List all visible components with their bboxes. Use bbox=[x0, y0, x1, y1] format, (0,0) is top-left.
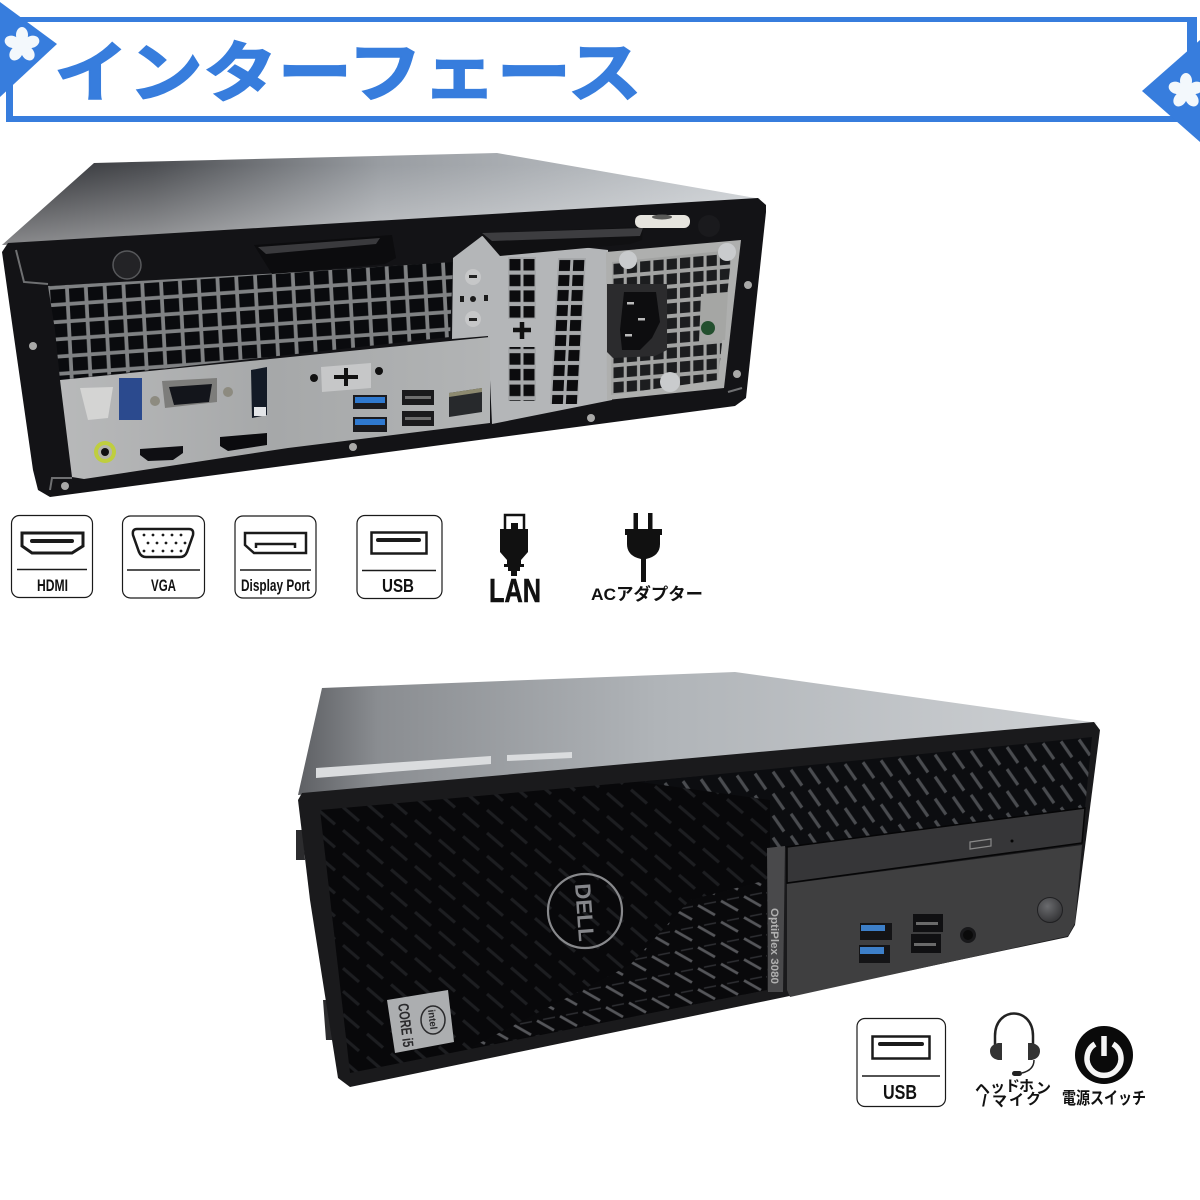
VGA port bbox=[150, 378, 233, 408]
icon: AC adapter plug bbox=[591, 513, 703, 604]
lower bright slashes bbox=[470, 880, 767, 1048]
expansion slot 1 bbox=[508, 257, 536, 401]
label: headphone / mic: / bbox=[982, 1091, 987, 1110]
icon: headset bbox=[990, 1014, 1040, 1076]
centre bracket bbox=[452, 236, 612, 424]
title banner bbox=[0, 2, 1200, 142]
LAN port bbox=[449, 388, 482, 417]
model text: OptiPlex 3080 bbox=[768, 908, 780, 984]
icon: power switch bbox=[1075, 1026, 1133, 1084]
rear chassis outline bbox=[2, 198, 766, 497]
barcode label bbox=[251, 367, 267, 418]
screw bbox=[698, 215, 720, 237]
front USB 3 ports bbox=[859, 923, 892, 963]
I/O plate bbox=[60, 337, 490, 479]
front audio jack bbox=[962, 928, 974, 942]
drive indicator bbox=[1010, 840, 1014, 842]
icon: HDMI bbox=[12, 516, 92, 598]
PSU plate bbox=[606, 240, 741, 400]
icon: Display Port bbox=[235, 516, 316, 598]
icon: LAN plug: LAN bbox=[489, 572, 541, 609]
silver strips bbox=[316, 752, 572, 778]
icon: AC adapter plug: ACアダプター bbox=[591, 584, 703, 604]
icon row: rear ports bbox=[12, 513, 703, 609]
photo: front of desktop PC bbox=[296, 672, 1100, 1087]
chassis screws bbox=[29, 281, 752, 490]
front top cover bbox=[298, 672, 1098, 795]
rear USB 3 ports bbox=[353, 395, 387, 432]
Dell logo bbox=[548, 874, 622, 948]
LED panel bbox=[699, 292, 728, 342]
Windows blue label bbox=[119, 378, 142, 420]
rear top cover bbox=[2, 153, 761, 245]
front grille bbox=[320, 770, 770, 1073]
front USB 2 ports bbox=[911, 914, 943, 953]
label: headphone / mic: ヘッドホン bbox=[975, 1078, 1051, 1098]
icon: HDMI: HDMI bbox=[37, 576, 68, 595]
label: headphone / mic: マイク bbox=[992, 1091, 1041, 1110]
icon: VGA bbox=[122, 516, 204, 598]
PSU vents bbox=[611, 250, 732, 395]
HP screw bbox=[113, 251, 141, 279]
rear USB 2 ports bbox=[402, 390, 434, 426]
white lock bbox=[635, 214, 690, 228]
label: headphone / mic bbox=[975, 1078, 1051, 1110]
icon: USB front bbox=[857, 1018, 946, 1106]
icon: Display Port: Display Port bbox=[241, 577, 310, 595]
banner ornament: left diamond with flower bbox=[0, 2, 57, 97]
feet at left bbox=[296, 830, 335, 1040]
icon: USB bbox=[357, 516, 442, 598]
rear HDMI port bbox=[140, 446, 183, 461]
title text: インターフェース bbox=[54, 36, 642, 110]
front chassis bbox=[298, 722, 1100, 1087]
front lower panel bbox=[787, 845, 1082, 997]
I/O plus plate bbox=[310, 363, 383, 392]
banner frame bbox=[6, 17, 1197, 122]
icon: LAN plug bbox=[489, 515, 541, 609]
icon: USB: USB bbox=[382, 576, 414, 596]
right handle bbox=[480, 227, 643, 256]
expansion slot 2 bbox=[550, 258, 586, 404]
icon: USB front: USB bbox=[883, 1082, 917, 1104]
PSU screws bbox=[619, 243, 736, 392]
model strip bbox=[767, 846, 785, 992]
icon row: front ports bbox=[857, 1014, 1146, 1110]
audio jack bbox=[94, 441, 116, 463]
power button bbox=[1038, 898, 1062, 922]
Intel CORE text: CORE i5 bbox=[394, 1002, 416, 1048]
Intel sticker bbox=[387, 990, 454, 1053]
bracket screws bbox=[460, 269, 488, 327]
icon: VGA: VGA bbox=[151, 576, 176, 595]
photo: rear of desktop PC bbox=[2, 153, 766, 497]
AC inlet bbox=[607, 284, 667, 358]
banner ornament: right diamond with flower bbox=[1142, 40, 1200, 142]
Windows sticker bbox=[80, 387, 113, 420]
chassis silver trim bbox=[16, 250, 742, 490]
optical drive bay bbox=[787, 808, 1085, 883]
Intel logo: intel bbox=[425, 1009, 438, 1030]
slot plus mark bbox=[513, 322, 531, 339]
green LED bbox=[701, 321, 715, 335]
left handle bbox=[254, 235, 396, 274]
label: power switch: 電源スイッチ bbox=[1062, 1089, 1146, 1108]
drive eject button bbox=[970, 839, 991, 849]
rear DisplayPort bbox=[220, 433, 267, 451]
rear fan grille bbox=[48, 262, 453, 380]
upper bright slashes bbox=[640, 737, 1092, 850]
Dell wordmark: DELL bbox=[570, 883, 599, 942]
